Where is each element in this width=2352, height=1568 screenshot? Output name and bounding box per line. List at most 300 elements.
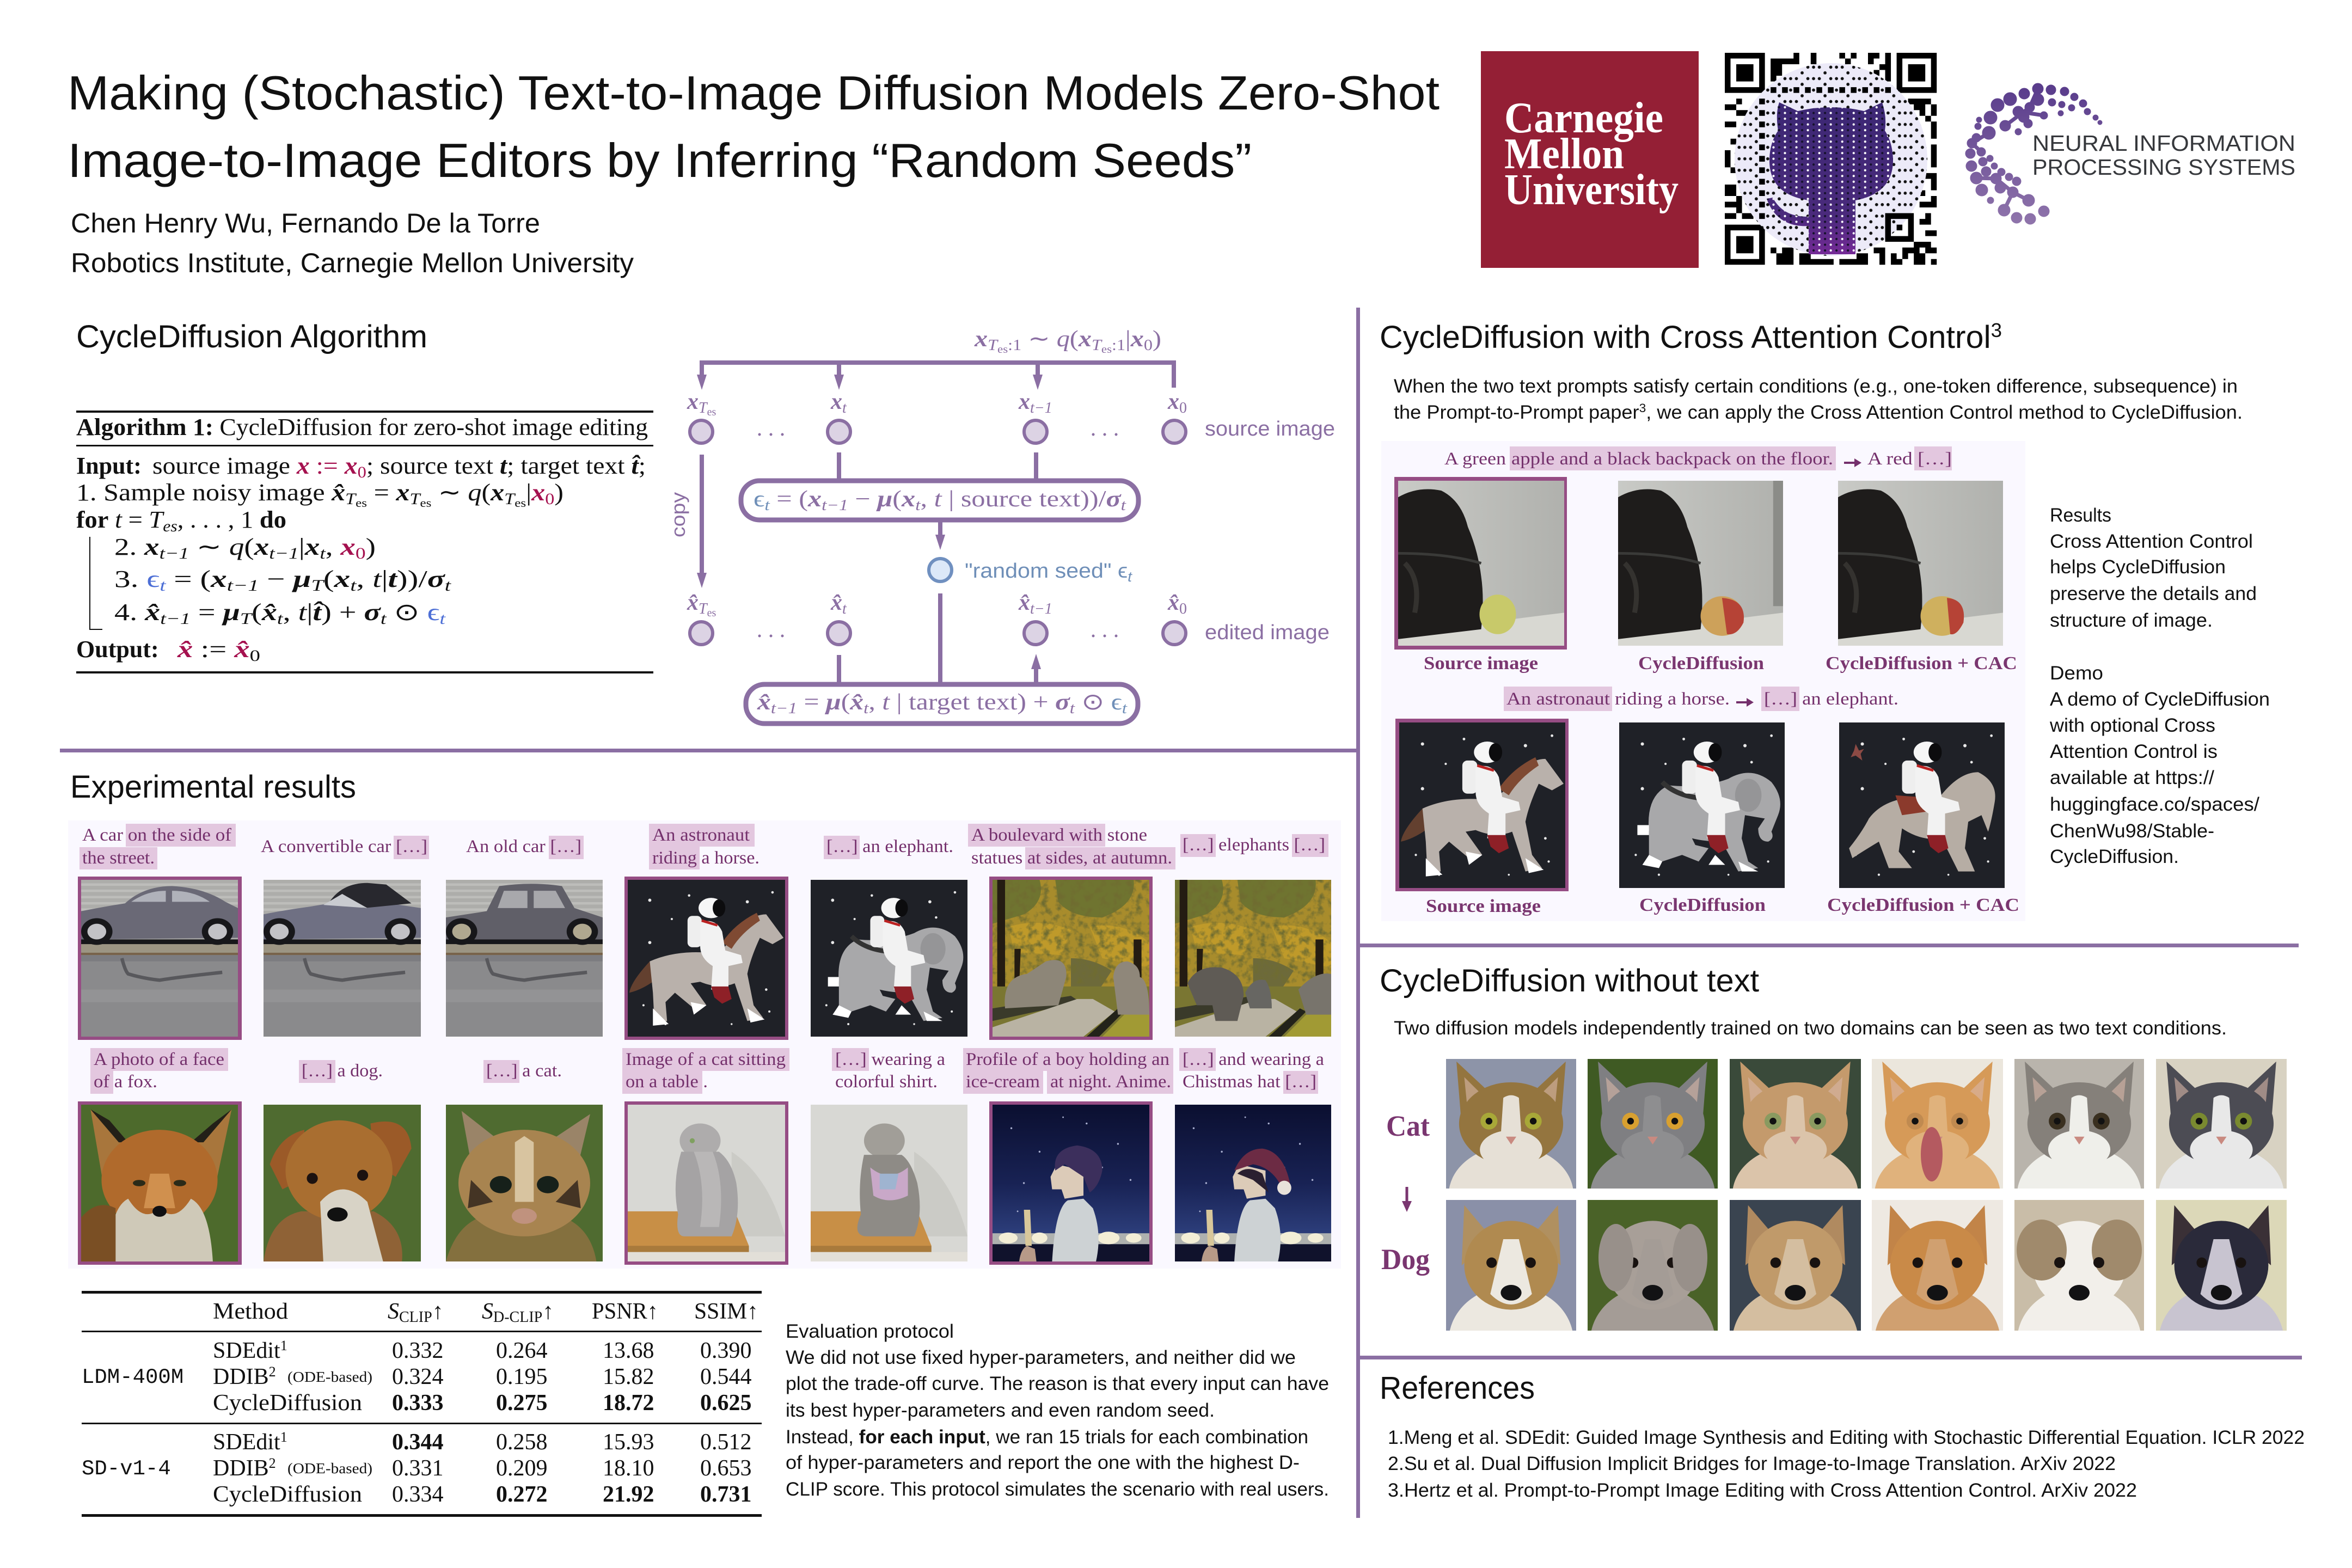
text block: CAC intro: 3: [1639, 401, 1646, 415]
text block: references list: 1.Meng et al. SDEdit: Guided Image Synthesis and Editing with Stochastic Differential Equation. ICLR 2022: [1388, 1427, 2305, 1448]
algorithm step 4: x̂: [261, 599, 277, 626]
table group: LDM-400M: 0.333: [392, 1391, 443, 1416]
table group: SD-v1-4: 0.209: [496, 1456, 548, 1481]
sampling equation: x: [974, 327, 988, 352]
panel: algorithm box: x̂ := x̂: [177, 636, 246, 663]
logo wordmark: PROCESSING SYSTEMS: [2032, 155, 2295, 180]
row 1 captions: A convertible car […]: [261, 837, 427, 856]
table group: SD-v1-4: SDEdit: [213, 1430, 280, 1455]
table group: SD-v1-4: 0.653: [700, 1456, 751, 1481]
logo: Carnegie Mellon University: Carnegie: [1504, 94, 1663, 142]
equation box: target: t−1: [771, 700, 797, 717]
algorithm step 4: t: [277, 610, 283, 628]
heading: CycleDiffusion with Cross Attention Control: CycleDiffusion with Cross Attention Control: [1380, 320, 1979, 355]
algorithm step 4: ,: [283, 599, 298, 626]
algorithm for line: do: [260, 506, 286, 533]
table group: LDM-400M: 13.68: [603, 1338, 654, 1363]
algorithm step 2: 2. x: [114, 534, 156, 560]
caption: apple prompt: apple and a black backpack on the floor.: [1511, 449, 1833, 469]
label: edited image: edited image: [1205, 621, 1330, 644]
algorithm step 1: ∼: [431, 479, 468, 506]
image: anime boy with ice-cream: [989, 1101, 1153, 1265]
sampling equation: es: [997, 344, 1008, 356]
algorithm step 4: T: [240, 610, 253, 628]
text block: results and demo: CycleDiffusion.: [2050, 846, 2179, 867]
table group: LDM-400M: [82, 1338, 751, 1416]
row 2 captions: […] a cat.: [486, 1061, 562, 1081]
algorithm step 4: =: [191, 599, 223, 626]
image: source car: [78, 877, 242, 1040]
text block: results and demo: Results: [2050, 505, 2111, 526]
sampling equation: x: [1130, 327, 1144, 352]
equation box: target: =: [797, 690, 826, 715]
copy arrow: [667, 455, 707, 588]
row 1 captions: A boulevard with stone: [971, 825, 1147, 845]
labels: apple row: CycleDiffusion + CAC: [1826, 653, 2017, 673]
row 1 captions: statues at sides, at autumn.: [971, 848, 1172, 868]
table group: LDM-400M: 2: [269, 1364, 276, 1380]
table group: SD-v1-4: 0.331: [392, 1456, 443, 1481]
algorithm step 1: 1. Sample noisy image x̂: [76, 479, 344, 506]
label: Dog: Dog: [1381, 1243, 1430, 1276]
algorithm step 3: t|t))/ σ: [372, 566, 440, 592]
table group: SD-v1-4: 18.10: [603, 1456, 654, 1481]
algorithm step 2: |: [299, 534, 305, 560]
algorithm step 2: x: [304, 534, 320, 560]
title: [68, 66, 1440, 187]
equation box: target: t: [863, 700, 869, 717]
text block: CAC intro: , we can apply the Cross Attention Control method to CycleDiffusion.: [1646, 402, 2243, 423]
table group: SD-v1-4: 0.258: [496, 1430, 548, 1455]
table header: D-CLIP: [493, 1309, 542, 1326]
algorithm step 4: t−1: [160, 610, 191, 628]
algorithm step 2: 0: [356, 544, 366, 562]
table group: LDM-400M: SDEdit: [213, 1338, 280, 1363]
panel: algorithm box: source image x := x: [152, 452, 357, 479]
caption: astronaut prompt: […] an elephant.: [1764, 689, 1898, 709]
node labels row 2: 0: [1179, 601, 1187, 617]
caption: astronaut prompt: An astronaut: [1506, 689, 1610, 709]
node labels row 1: x: [1018, 389, 1030, 414]
equation box: target: [746, 684, 1138, 724]
panel: results grid: [68, 820, 1341, 1269]
algorithm step 4: t|t̂) + σ: [298, 599, 377, 626]
algorithm title: Algorithm 1: CycleDiffusion for zero-shot image editing: [76, 414, 648, 440]
equation box: source: = (: [770, 487, 808, 512]
algorithm step 4: t: [381, 610, 387, 628]
logo: Neural Information Processing Systems: [1967, 84, 2295, 223]
image: cat in colorful shirt: [811, 1105, 967, 1261]
image: boulevard with elephants: [1175, 880, 1331, 1037]
image: astronaut riding elephant: [811, 880, 967, 1037]
text block: references list: [1388, 1427, 2305, 1501]
table group: SD-v1-4: CycleDiffusion: [213, 1482, 362, 1507]
image row: dogs: [1446, 1200, 2287, 1396]
sampling equation: q(x: [1057, 327, 1090, 352]
table: quantitative results: [82, 1291, 762, 1517]
row 2 captions: Chistmas hat […]: [1183, 1072, 1316, 1092]
equation box: source: ϵ: [754, 487, 764, 512]
algorithm step 2: t: [320, 544, 326, 562]
text block: CAC intro: [1394, 376, 2243, 423]
algorithm for line: es: [163, 517, 177, 535]
table group: LDM-400M: 0.275: [496, 1391, 548, 1416]
panel: algorithm box: 0: [250, 647, 260, 665]
heading: References: References: [1380, 1370, 1535, 1406]
text block: evaluation protocol: [786, 1321, 1329, 1500]
caption: astronaut prompt: [1504, 687, 1898, 711]
table header: [213, 1299, 758, 1326]
labels: apple row: [1424, 653, 2017, 673]
labels: astronaut row: CycleDiffusion: [1639, 895, 1766, 915]
row 1 captions: [79, 824, 1328, 869]
table header: Method: [213, 1299, 288, 1324]
text block: references list: 3.Hertz et al. Prompt-to-Prompt Image Editing with Cross Attention Control. ArXiv 2022: [1388, 1480, 2137, 1501]
nodes row 1: . . .: [757, 416, 785, 441]
row 1 captions: riding a horse.: [652, 848, 759, 868]
equation box: source: −: [848, 487, 877, 512]
image: backpack CycleDiffusion + CAC: [1838, 481, 2003, 646]
text block: evaluation protocol: its best hyper-parameters and even random seed.: [786, 1400, 1215, 1421]
algorithm step 1: T: [409, 490, 421, 508]
algorithm step 3: ,: [357, 566, 372, 592]
algorithm step 1: =: [367, 479, 396, 506]
sampling equation: T: [1092, 337, 1103, 354]
algorithm step 3: 3. ϵ: [114, 566, 156, 592]
algorithm step 1: q(x: [468, 479, 503, 506]
table group: LDM-400M: 18.72: [603, 1391, 654, 1416]
labels: astronaut row: CycleDiffusion + CAC: [1827, 895, 2019, 915]
image: backpack CycleDiffusion: [1618, 481, 1783, 646]
table group: SD-v1-4: DDIB: [213, 1456, 269, 1481]
table header: S: [482, 1299, 493, 1324]
title: Making (Stochastic) Text-to-Image Diffusion Models Zero-Shot: [68, 66, 1440, 120]
table group: SD-v1-4: (ODE-based): [287, 1460, 372, 1477]
algorithm output: Output:: [76, 636, 159, 663]
row 1 captions: […] an elephant.: [826, 837, 953, 856]
heading: CycleDiffusion Algorithm: CycleDiffusion Algorithm: [76, 319, 427, 354]
algorithm step 3: x: [210, 566, 227, 592]
node labels row 1: t: [842, 400, 847, 416]
algorithm step 1: es: [514, 496, 526, 510]
image: dog: [264, 1105, 421, 1261]
authors and affiliation: Chen Henry Wu, Fernando De la Torre: [71, 208, 540, 238]
algorithm step 3: T: [311, 577, 325, 595]
table group: LDM-400M: (ODE-based): [287, 1369, 372, 1385]
row 2 captions: ice-cream: [966, 1072, 1040, 1092]
row 1 captions: the street.: [82, 848, 155, 868]
text block: evaluation protocol: Evaluation protocol: [786, 1321, 954, 1342]
caption: apple prompt: A red […]: [1867, 449, 1952, 469]
table group: LDM-400M: 0.390: [700, 1338, 751, 1363]
algorithm step 3: t: [160, 577, 166, 595]
algorithm for line: for t = T: [76, 506, 162, 533]
image: source astronaut: [1395, 719, 1569, 891]
nodes row 2: . . .: [757, 617, 785, 642]
QR code with GitHub cat: [1725, 53, 1937, 265]
node labels row 2: es: [707, 607, 716, 619]
table group: LDM-400M: 0.625: [700, 1391, 751, 1416]
row 2 captions: at night. Anime.: [1050, 1072, 1171, 1092]
node labels row 2: x̂: [1167, 590, 1179, 615]
nodes row 2: [690, 617, 1186, 645]
algorithm step 4: t: [439, 610, 446, 628]
algorithm for line: , . . . , 1: [177, 506, 260, 533]
row 2 captions: […] and wearing a: [1183, 1050, 1324, 1069]
table group: LDM-400M: CycleDiffusion: [213, 1391, 362, 1416]
table group: LDM-400M: 1: [280, 1338, 287, 1353]
equation box: source: x: [807, 487, 822, 512]
sampling equation: ): [1153, 327, 1161, 352]
algorithm step 3: x: [333, 566, 350, 592]
table group: SD-v1-4: 0.731: [700, 1482, 751, 1507]
text block: results and demo: helps CycleDiffusion: [2050, 556, 2226, 578]
panel: algorithm box: t; target text t̂;: [500, 452, 645, 479]
sampling equation: ∼: [1021, 327, 1057, 352]
image: fox: [78, 1101, 242, 1265]
title: Image-to-Image Editors by Inferring “Random Seeds”: [68, 133, 1252, 187]
node labels row 1: x: [830, 389, 842, 414]
diagram: CycleDiffusion process: [667, 327, 1335, 724]
logo wordmark: [2032, 131, 2295, 180]
node labels row 1: x: [1167, 389, 1179, 414]
text block: without text intro: Two diffusion models independently trained on two domains can be seen as two text conditions.: [1394, 1018, 2227, 1039]
image: astronaut CycleDiffusion: [1619, 722, 1785, 888]
table group: SD-v1-4: 0.344: [392, 1430, 443, 1455]
text block: results and demo: A demo of CycleDiffusion: [2050, 689, 2270, 710]
algorithm step 4: ⊙: [386, 599, 427, 626]
row 2 captions: A photo of a face: [94, 1050, 224, 1069]
table header: S: [388, 1299, 399, 1324]
table group: LDM-400M: 0.332: [392, 1338, 443, 1363]
table group: SD-v1-4: 2: [269, 1455, 276, 1471]
image: old car: [446, 880, 603, 1037]
image: astronaut riding horse: [624, 877, 788, 1040]
table group: LDM-400M: 0.264: [496, 1338, 548, 1363]
algorithm step 1: es: [356, 496, 367, 510]
row 2 captions: […] a dog.: [302, 1061, 383, 1081]
algorithm step 3: t: [350, 577, 357, 595]
panel: algorithm box: [76, 411, 653, 673]
equation box: target: μ(x̂: [826, 690, 861, 715]
equation box: source: t: [915, 497, 921, 514]
node labels row 2: x̂: [830, 590, 842, 615]
algorithm step 1: T: [345, 490, 357, 508]
table group: SD-v1-4: 1: [280, 1429, 287, 1445]
table group: SD-v1-4: 0.512: [700, 1430, 751, 1455]
row 2 captions: [90, 1048, 1324, 1094]
heading: Experimental results: Experimental results: [70, 769, 356, 805]
equation box: source: t−1: [822, 497, 848, 514]
equation box: target: ϵ: [1111, 690, 1122, 715]
table group: LDM-400M: 0.324: [392, 1364, 443, 1389]
algorithm step 3: t−1: [227, 577, 259, 595]
algorithm step 2: t−1: [269, 544, 299, 562]
node labels row 2: t: [842, 601, 847, 617]
equation box: target: t | target text) + σ: [882, 690, 1068, 715]
labels: apple row: CycleDiffusion: [1638, 653, 1764, 673]
heading: CycleDiffusion without text: CycleDiffusion without text: [1380, 963, 1759, 999]
algorithm step 1: x: [531, 479, 545, 506]
row 2 captions: of a fox.: [94, 1072, 157, 1092]
table group: SD-v1-4: 21.92: [603, 1482, 654, 1507]
table group: SD-v1-4: [82, 1429, 751, 1507]
algorithm step 2: ,: [326, 534, 340, 560]
equation box: target: ,: [868, 690, 882, 715]
algorithm step 3: t: [445, 577, 451, 595]
logo: Carnegie Mellon University: Mellon: [1504, 130, 1624, 178]
equation box: source: t: [764, 497, 770, 514]
image: anime boy with Christmas hat: [1175, 1105, 1331, 1261]
label: Cat: Cat: [1386, 1110, 1430, 1142]
algorithm step 1: |: [526, 479, 531, 506]
row 1 captions: An astronaut: [652, 825, 750, 845]
text block: results and demo: [2049, 505, 2270, 867]
image: cat: [446, 1105, 603, 1261]
algorithm step 4: ϵ: [427, 599, 439, 626]
algorithm step 2: x: [340, 534, 356, 560]
text block: results and demo: ChenWu98/Stable-: [2050, 820, 2214, 842]
table group: LDM-400M: 15.82: [603, 1364, 654, 1389]
node labels row 2: T: [699, 601, 708, 617]
logo wordmark: NEURAL INFORMATION: [2032, 131, 2295, 156]
algorithm input line: Input:: [76, 452, 142, 479]
node labels row 1: es: [707, 406, 716, 418]
panel: algorithm box: 0: [358, 463, 366, 481]
caption: astronaut prompt: riding a horse.: [1615, 689, 1730, 709]
image: source backpack: [1394, 477, 1567, 650]
text block: results and demo: available at https://: [2050, 767, 2214, 788]
nodes row 2: . . .: [1091, 617, 1119, 642]
label: source image: source image: [1205, 418, 1335, 440]
text block: results and demo: structure of image.: [2050, 610, 2213, 631]
node labels row 2: t−1: [1030, 601, 1052, 617]
equation box: source: t | source text))/ σ: [934, 487, 1118, 512]
table group: SD-v1-4: 15.93: [603, 1430, 654, 1455]
bracket arrows: [697, 363, 1174, 390]
table group: LDM-400M: DDIB: [213, 1364, 269, 1389]
authors and affiliation: [71, 208, 634, 278]
equation box: target: x̂: [757, 690, 771, 715]
table header: PSNR↑: [592, 1299, 658, 1324]
nodes row 1: . . .: [1091, 416, 1119, 441]
text block: results and demo: Attention Control is: [2050, 741, 2218, 762]
text block: evaluation protocol: Instead, for each input, we ran 15 trials for each combination: [786, 1426, 1308, 1448]
authors and affiliation: Robotics Institute, Carnegie Mellon University: [71, 248, 634, 278]
table group: LDM-400M: 0.195: [496, 1364, 548, 1389]
node labels row 1: 0: [1179, 400, 1187, 416]
text block: results and demo: Demo: [2050, 663, 2103, 684]
row 2 captions: on a table .: [626, 1072, 708, 1092]
sampling equation: :1: [1008, 337, 1021, 354]
logo: Carnegie Mellon University: University: [1504, 166, 1679, 214]
panel: algorithm box: ; source text: [366, 452, 500, 479]
algorithm step 2: ): [366, 534, 376, 560]
labels: astronaut row: Source image: [1426, 896, 1541, 916]
text block: evaluation protocol: CLIP score. This protocol simulates the scenario with real users.: [786, 1479, 1329, 1500]
text block: results and demo: preserve the details and: [2050, 583, 2257, 604]
row 1 captions: An old car […]: [466, 837, 581, 856]
algorithm step 2: ∼: [189, 534, 229, 560]
text block: evaluation protocol: We did not use fixed hyper-parameters, and neither did we: [786, 1347, 1296, 1368]
algorithm step 3: (: [323, 566, 334, 592]
algorithm step 4: 4. x̂: [114, 599, 157, 626]
table group: SD-v1-4: 0.272: [496, 1482, 548, 1507]
image: boulevard with statues: [989, 877, 1153, 1040]
text block: CAC intro: When the two text prompts satisfy certain conditions (e.g., one-token difference, subsequence) in: [1394, 376, 2238, 397]
text block: results and demo: with optional Cross: [2049, 715, 2215, 736]
nodes row 1: [690, 416, 1186, 443]
table group: SD-v1-4: SD-v1-4: [82, 1457, 171, 1481]
equation box: source: t: [1121, 497, 1126, 514]
text block: CAC intro: the Prompt-to-Prompt paper: [1394, 402, 1631, 423]
equation box: target: ⊙: [1075, 690, 1111, 715]
row 2 captions: Image of a cat sitting: [626, 1050, 786, 1069]
node labels row 1: [687, 389, 1187, 418]
node labels row 2: x̂: [687, 590, 699, 615]
node labels row 2: [687, 590, 1187, 619]
row 2 captions: Profile of a boy holding an: [966, 1050, 1169, 1069]
algorithm step 2: q(x: [229, 534, 266, 560]
equation box: source: μ(x: [877, 487, 913, 512]
row 1 captions: A car on the side of: [82, 825, 231, 845]
table header: ↑: [542, 1299, 554, 1324]
sampling equation: |: [1125, 327, 1131, 352]
image: cat on table: [624, 1101, 788, 1265]
caption: apple prompt: A green: [1444, 449, 1506, 469]
node: random seed: [929, 559, 1133, 585]
algorithm step 3: μ: [292, 566, 311, 592]
algorithm step 3: = (: [166, 566, 211, 592]
heading: CycleDiffusion with Cross Attention Control: 3: [1991, 319, 2002, 341]
table header: ↑: [432, 1299, 444, 1324]
algorithm step 3: −: [259, 566, 293, 592]
text block: evaluation protocol: of hyper-parameters and report the one with the highest D-: [786, 1452, 1300, 1473]
image row: cats: [1446, 1059, 2287, 1244]
labels: apple row: Source image: [1424, 653, 1538, 673]
algorithm step 1: 0: [545, 490, 554, 508]
sampling equation: T: [988, 337, 999, 354]
text block: results and demo: Cross Attention Control: [2050, 531, 2253, 552]
image: convertible car: [264, 880, 421, 1037]
row 1 captions: […] elephants […]: [1183, 835, 1325, 855]
equation box: target: t: [1122, 700, 1128, 717]
node: random seed: "random seed" ϵ: [965, 560, 1115, 583]
logo: Carnegie Mellon University: [1481, 51, 1699, 268]
sampling equation: :1: [1112, 337, 1125, 354]
sampling equation: 0: [1144, 337, 1153, 354]
equation box: target: t: [1070, 700, 1075, 717]
text block: results and demo: huggingface.co/spaces/: [2050, 794, 2259, 815]
copy arrow: copy: [667, 492, 689, 537]
logo swirl dots: [1967, 84, 2101, 223]
node labels row 1: T: [699, 400, 708, 416]
algorithm step 1: x: [395, 479, 409, 506]
algorithm step 1: es: [420, 496, 431, 510]
labels: astronaut row: [1426, 895, 2019, 916]
text block: evaluation protocol: plot the trade-off curve. The reason is that every input can have: [786, 1373, 1329, 1394]
algorithm step 4: (: [252, 599, 262, 626]
table header: CLIP: [399, 1309, 432, 1326]
table group: LDM-400M: LDM-400M: [82, 1365, 183, 1389]
node labels row 2: x̂: [1018, 590, 1030, 615]
arrow: cat to dog: [1402, 1187, 1412, 1212]
image: astronaut CycleDiffusion + CAC: [1839, 722, 2005, 888]
node: random seed: t: [1128, 568, 1133, 585]
table group: LDM-400M: 0.544: [700, 1364, 751, 1389]
algorithm step 4: μ: [222, 599, 240, 626]
row 2 captions: […] wearing a: [835, 1050, 945, 1069]
